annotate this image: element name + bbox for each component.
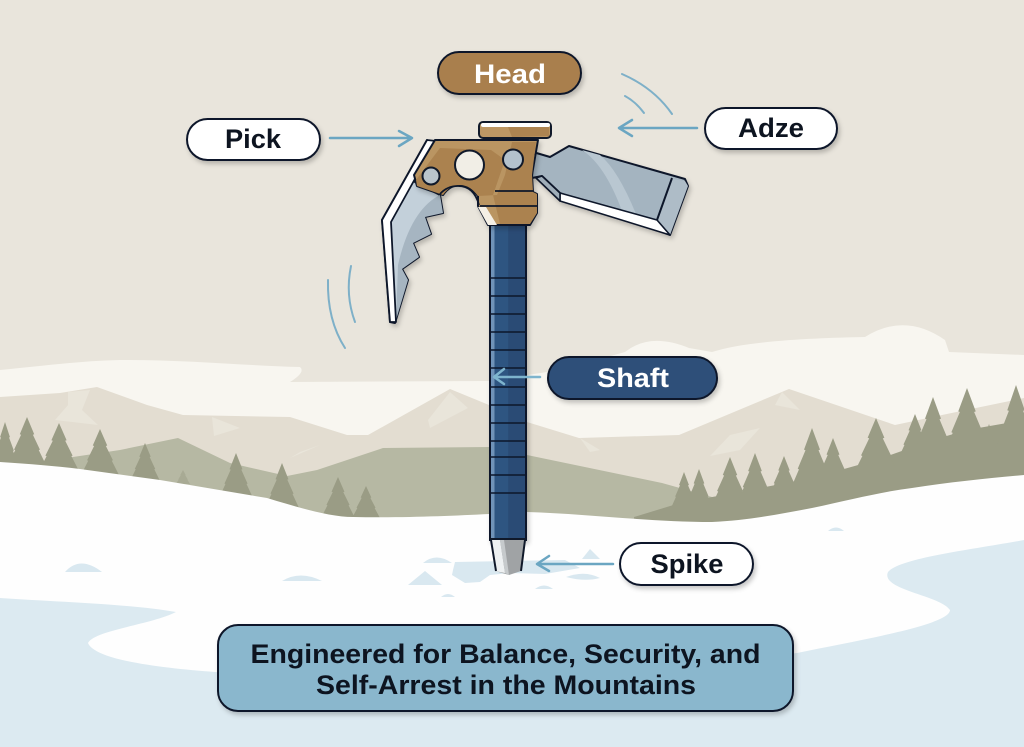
adze blade xyxy=(532,146,688,235)
right trees xyxy=(671,385,1024,509)
label: adze: Adze xyxy=(738,113,804,143)
left trees xyxy=(0,417,380,518)
head holes xyxy=(422,150,523,184)
head body xyxy=(414,140,538,225)
label: head xyxy=(438,52,581,94)
label: shaft xyxy=(548,357,717,399)
ice patches around spike xyxy=(65,528,844,597)
arrow: pick xyxy=(330,131,412,146)
cloud band xyxy=(0,325,1024,480)
shaft xyxy=(490,224,526,540)
head cap xyxy=(479,122,551,138)
label: shaft: Shaft xyxy=(597,363,669,393)
caption banner: Self-Arrest in the Mountains xyxy=(316,670,696,700)
mountain snow patches xyxy=(55,390,800,458)
label: spike xyxy=(620,543,753,585)
label: adze xyxy=(705,108,837,149)
snow field xyxy=(0,462,1024,747)
ice axe xyxy=(382,122,688,575)
label: pick: Pick xyxy=(225,124,282,154)
caption banner: Engineered for Balance, Security, and xyxy=(250,639,760,669)
mid hills xyxy=(0,438,720,530)
caption banner xyxy=(218,625,793,711)
label: pick xyxy=(187,119,320,160)
label: head: Head xyxy=(474,59,546,89)
back mountains xyxy=(0,387,1024,520)
motion lines: pick xyxy=(328,266,355,348)
arrow: shaft xyxy=(494,369,540,384)
arrow: adze xyxy=(619,120,697,136)
forest ground xyxy=(634,420,1024,530)
pick blade xyxy=(382,140,443,323)
spike xyxy=(490,539,526,575)
arrow: spike xyxy=(537,556,613,571)
motion lines: adze xyxy=(622,74,672,114)
label: spike: Spike xyxy=(650,549,724,579)
frozen water xyxy=(0,540,1024,747)
